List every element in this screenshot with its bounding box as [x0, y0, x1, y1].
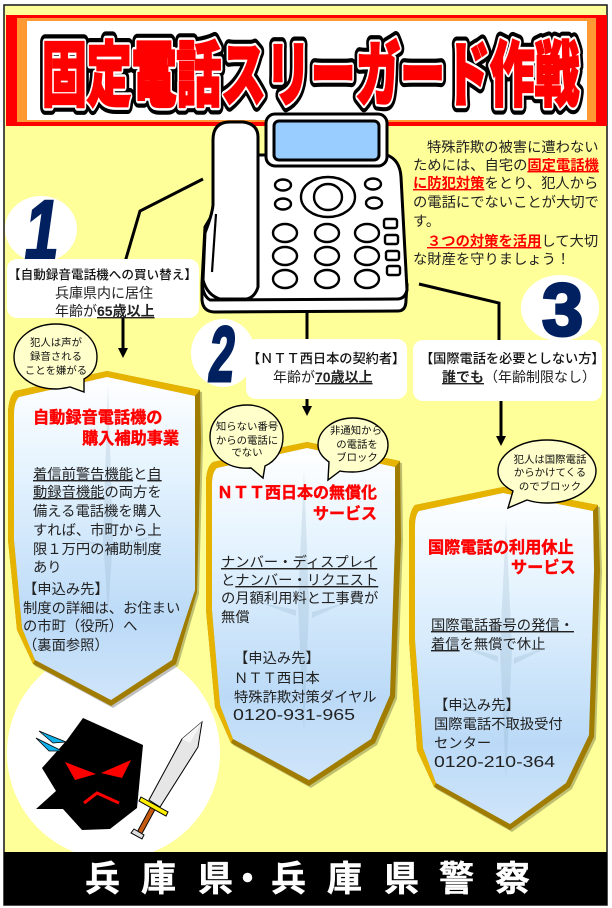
title: 固定電話スリーガード作戦 [42, 35, 579, 116]
body text [23, 466, 180, 654]
callout: recording: 録音される [30, 350, 82, 363]
title: 固定電話スリーガード作戦 [42, 35, 579, 116]
body text: 備える電話機を購入 [33, 503, 161, 520]
callout: anonymous calls [318, 418, 388, 480]
body text: 着信前警告機能と自 [33, 466, 162, 483]
body text: 国際電話不取扱受付 [434, 716, 563, 733]
box: target 2: 【ＮＴＴ西日本の契約者】 [247, 351, 405, 366]
body text: 国際電話番号の発信・ [431, 617, 574, 634]
scene circle with character [7, 646, 220, 860]
phone keys [273, 177, 400, 288]
phone display [266, 114, 387, 166]
callout: international calls [498, 440, 596, 508]
number 1: 1 [19, 183, 66, 277]
body text: 制度の詳細は、お住まい [23, 600, 180, 617]
body text: 【申込み先】 [434, 697, 520, 714]
intro text: ３つの対策を活用して大切 [427, 232, 598, 250]
body text: あり [33, 559, 62, 576]
body text: ナンバー・ディスプレイ [221, 553, 377, 571]
box: target 3: 誰でも（年齢制限なし） [442, 369, 596, 385]
number 2: 2 [205, 310, 240, 398]
callout: anonymous calls: ブロック [336, 451, 378, 464]
body text [431, 617, 574, 771]
heading: ＮＴＴ西日本の無償化 [217, 484, 377, 502]
body text: すれば、市町から上 [33, 522, 162, 539]
panel: international call suspension [409, 487, 602, 832]
body text: とナンバー・リクエスト [221, 572, 378, 589]
box: target 1: 【自動録音電話機への買い替え】 [8, 267, 197, 282]
body text: 0120-931-965 [233, 707, 355, 724]
callout: unknown numbers: からの電話に [216, 435, 278, 447]
box: target 3: 【国際電話を必要としない方】 [420, 351, 605, 366]
heading [428, 539, 576, 577]
heading: サービス [313, 504, 377, 523]
box: target 2 [246, 339, 407, 399]
footer [4, 852, 607, 905]
callout: international calls: のでブロック [519, 480, 581, 493]
body text: 特殊詐欺対策ダイヤル [234, 689, 377, 706]
body text: 着信を無償で休止 [431, 636, 545, 653]
heading: 自動録音電話機の [33, 408, 162, 427]
body text: 【申込み先】 [234, 650, 320, 667]
handset [203, 122, 258, 299]
callout: unknown numbers: でない [231, 447, 263, 459]
footer: 兵庫県・兵庫県警察 [85, 860, 530, 899]
heading [217, 484, 377, 523]
body text: （裏面参照） [23, 637, 109, 654]
panel: NTT service [206, 442, 403, 788]
intro text: す。 [413, 213, 440, 230]
body text: の月額利用料と工事費が [221, 590, 378, 607]
box: target 2: 年齢が70歳以上 [273, 369, 373, 385]
intro text: に防犯対策をとり、犯人から [413, 174, 598, 192]
number 2 [191, 310, 255, 398]
callout: recording: 犯人は声が [30, 336, 83, 349]
box: target 1 [7, 259, 199, 319]
body text: 0120-210-364 [434, 754, 555, 771]
callout: recording: ことを嫌がる [25, 364, 87, 377]
intro text: な財産を守りましょう！ [413, 251, 570, 268]
callout: international calls: 犯人は国際電話 [514, 454, 587, 466]
number 1 [5, 183, 77, 277]
body text: センター [434, 735, 491, 752]
icon: telephone [202, 114, 407, 312]
callout: unknown numbers: 知らない番号 [216, 420, 278, 433]
title: 固定電話スリーガード作戦 [42, 35, 579, 116]
box: target 3 [413, 340, 605, 401]
body text: 【申込み先】 [23, 581, 109, 598]
body text: の市町（役所）へ [23, 618, 137, 635]
callout: anonymous calls: 非通知から [330, 424, 382, 437]
intro text: の電話にでないことが大切で [413, 194, 599, 211]
number 3: 3 [542, 268, 583, 351]
body text: 動録音機能の両方を [33, 484, 162, 501]
heading: 国際電話の利用休止 [428, 539, 574, 557]
body text: 無償 [221, 609, 250, 626]
number 3 [521, 268, 599, 351]
callout: recording [14, 324, 97, 392]
callout: anonymous calls: の電話を [336, 439, 378, 451]
callout: international calls: からかけてくる [514, 467, 586, 479]
heading: 購入補助事業 [82, 429, 179, 448]
box: target 1: 年齢が65歳以上 [55, 303, 155, 319]
intro text [413, 139, 600, 268]
body text: 限１万円の補助制度 [33, 541, 162, 558]
heading [33, 408, 179, 448]
icon: black villain head [36, 718, 143, 830]
callout: unknown numbers [210, 405, 283, 478]
panel: recording phone subsidy [8, 371, 203, 708]
title banner [6, 15, 607, 126]
box: target 1: 兵庫県内に居住 [55, 285, 153, 301]
intro text: 特殊詐欺の被害に遭わない [427, 139, 599, 156]
body text: ＮＴＴ西日本 [234, 670, 320, 687]
connector lines and arrows [118, 179, 506, 446]
heading: サービス [511, 558, 576, 577]
icon: sword [131, 722, 202, 839]
body text [221, 553, 378, 724]
intro text: ためには、自宅の固定電話機 [413, 157, 600, 174]
